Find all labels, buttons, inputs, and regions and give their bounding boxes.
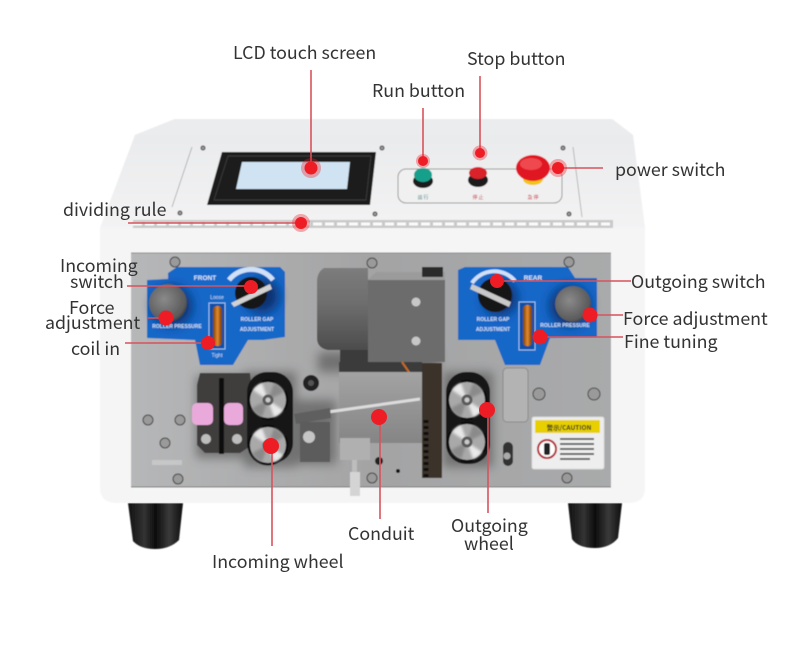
callout: stop button: Stop button (467, 45, 566, 71)
left blue control plate: FRONT (194, 275, 216, 282)
left blue control plate: Tight (212, 353, 223, 359)
callout: force adjustment left: adjustment (45, 309, 141, 335)
callout: outgoing wheel: wheel (464, 530, 514, 556)
callout: conduit (348, 409, 415, 546)
callout: dividing rule: dividing rule (63, 196, 167, 222)
gap selector knob (470, 271, 517, 315)
callout: force adjustment left: Force (69, 294, 115, 320)
outgoing wheels (446, 372, 490, 464)
callout: conduit: Conduit (348, 520, 415, 546)
callout: outgoing switch (490, 268, 766, 294)
callout: power switch: power switch (615, 156, 725, 182)
left blue control plate: ROLLER PRESSURE (152, 324, 202, 330)
emergency power button: 急 停 (527, 194, 539, 201)
LCD touch screen (207, 152, 376, 205)
left blue control plate (147, 267, 285, 365)
callout: incoming wheel (212, 438, 344, 574)
top panel screws (178, 146, 571, 216)
lid guide lines (172, 147, 582, 217)
left blue control plate: Loose (210, 295, 224, 301)
emergency power button (516, 155, 550, 201)
pressure knob (550, 286, 591, 326)
callout: dividing rule (63, 196, 310, 232)
incoming wheels (247, 372, 293, 466)
machine top face (100, 119, 645, 228)
callout: force adjustment left (45, 294, 174, 335)
callout: force adjustment right: Force adjustment (623, 305, 768, 331)
right blue control plate: ROLLER GAP (477, 317, 510, 323)
run button: 运 行 (417, 194, 429, 201)
callout: incoming switch (60, 252, 258, 294)
callout: incoming switch: Incoming (60, 252, 138, 278)
callout: LCD touch screen: LCD touch screen (233, 39, 376, 65)
caution label: 警示/CAUTION (547, 422, 592, 432)
pressure knob (149, 284, 192, 326)
tuning coil (519, 302, 535, 350)
lid rear bevel (135, 119, 633, 135)
callout: fine tuning (532, 328, 718, 354)
callout: LCD touch screen (233, 39, 376, 178)
silver slot and lower hole (503, 368, 528, 466)
right blue control plate: ADJUSTMENT (476, 327, 510, 333)
right blue control plate: ROLLER PRESSURE (540, 323, 590, 329)
wire guide block with pink spools (192, 373, 252, 454)
callout: fine tuning: Fine tuning (624, 328, 718, 354)
machine feet (128, 503, 622, 549)
callout: coil in: coil in (71, 335, 120, 361)
gap selector knob (229, 269, 279, 313)
run button (413, 168, 433, 201)
panel screws (143, 257, 600, 484)
right blue control plate (458, 267, 597, 365)
control button panel (398, 155, 562, 203)
caution label (532, 417, 604, 469)
tuning coil (209, 303, 225, 349)
callout: stop button (467, 45, 566, 160)
drive belt (422, 363, 442, 478)
ruler strip (133, 220, 613, 228)
right blue control plate: REAR (524, 275, 543, 282)
callout: coil in (71, 335, 215, 361)
conduit block and rod (294, 362, 422, 496)
callout: incoming wheel: Incoming wheel (212, 548, 344, 574)
grey front panel (131, 253, 611, 487)
machine photograph (100, 119, 645, 503)
soft shadows on panel (196, 352, 493, 467)
machine body (100, 119, 645, 503)
callout: incoming switch: switch (70, 268, 124, 294)
left blue control plate: ADJUSTMENT (240, 327, 274, 333)
callout: outgoing switch: Outgoing switch (631, 268, 766, 294)
stop button: 停 止 (472, 194, 484, 201)
central motor (317, 267, 445, 362)
stop button (468, 167, 488, 201)
callout: run button (372, 77, 465, 168)
callout: run button: Run button (372, 77, 465, 103)
callout: power switch (549, 156, 725, 182)
callout: outgoing wheel: Outgoing (451, 512, 528, 538)
left blue control plate: ROLLER GAP (241, 317, 274, 323)
callout: outgoing wheel (451, 402, 528, 556)
